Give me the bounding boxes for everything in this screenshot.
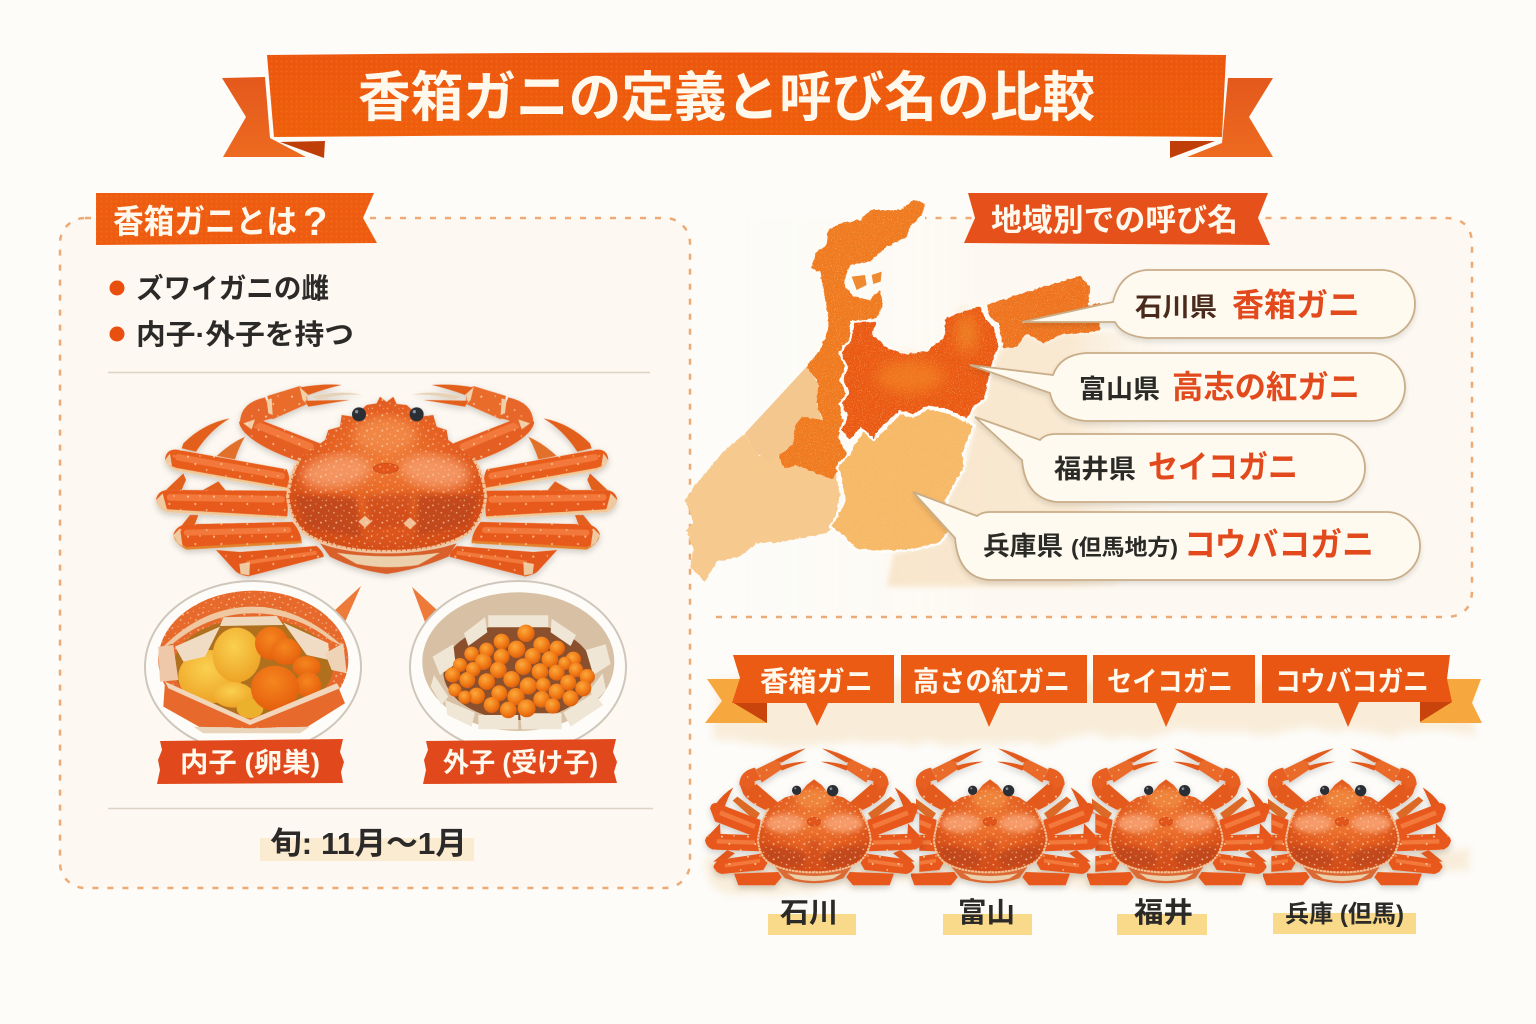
comparison ribbon [705, 655, 1482, 727]
ribbon tab: Koshi no Beni [901, 655, 1087, 727]
callout: Toyama [970, 353, 1405, 421]
panel heading: ? [303, 200, 327, 244]
panel: what is kobako crab [60, 193, 690, 888]
bullet list: 内子·外子を持つ [136, 319, 354, 350]
ribbon tab: Koubako: コウバコガニ [1275, 666, 1429, 697]
region label: Toyama [943, 897, 1032, 935]
crab: Ishikawa [705, 748, 923, 885]
illustration: snow crab [156, 385, 617, 576]
heading: regional names [964, 193, 1270, 245]
region label: Fukui: 福井 [1134, 897, 1193, 928]
region label: Fukui [1117, 897, 1207, 935]
region label: Hyogo: 兵庫 (但馬) [1285, 901, 1404, 928]
callout: Fukui: 福井県 [1054, 454, 1136, 484]
season note: 旬: 11月〜1月 [270, 826, 467, 861]
callout: Fukui: セイコガニ [1148, 449, 1298, 485]
bullet list [110, 272, 354, 350]
callout: Toyama: 高志の紅ガニ [1172, 369, 1360, 405]
panel heading [96, 193, 377, 245]
crab: Toyama [881, 748, 1099, 885]
ribbon tab: Kobako [732, 655, 894, 726]
heading: regional names: 地域別での呼び名 [991, 203, 1238, 238]
ribbon tab: Kobako: 香箱ガニ [760, 666, 873, 697]
ribbon tab: Koubako [1262, 655, 1452, 727]
title ribbon [222, 52, 1273, 158]
callout: Ishikawa: 香箱ガニ [1232, 287, 1360, 323]
region label: Toyama: 富山 [958, 897, 1015, 928]
region label: Hyogo [1273, 901, 1416, 934]
panel: regional names outline [716, 218, 1472, 617]
callout: Hyogo: (但馬地方) [1071, 535, 1178, 560]
title text: 香箱ガニの定義と呼び名の比較 [358, 68, 1095, 128]
callout: Ishikawa: 石川県 [1135, 292, 1217, 322]
inset: outer eggs [410, 581, 626, 753]
callout: Hyogo [913, 492, 1420, 580]
pointer arrows [335, 586, 437, 622]
comparison section background wash [702, 680, 1472, 898]
callout: Hyogo: コウバコガニ [1184, 526, 1374, 563]
crab: Hyogo [1233, 748, 1451, 885]
callout: Hyogo: 兵庫県 [983, 531, 1063, 561]
ribbon tab: Seiko: セイコガニ [1107, 666, 1233, 697]
callout: Fukui [975, 417, 1365, 502]
bullet list: ズワイガニの雌 [136, 272, 329, 304]
label: outer eggs [423, 739, 617, 784]
ribbon tab: Koshi no Beni: 高さの紅ガニ [913, 666, 1070, 697]
inset: inner roe [145, 581, 361, 753]
panel heading: 香箱ガニとは [113, 203, 297, 240]
ribbon tab: Seiko [1093, 655, 1255, 727]
map: regional prefectures [685, 200, 1193, 587]
callout: Toyama: 富山県 [1079, 374, 1160, 404]
region label: Ishikawa: 石川 [780, 897, 838, 928]
crab: Fukui [1057, 748, 1275, 885]
label: inner roe [157, 739, 344, 784]
callout: Ishikawa [1022, 270, 1415, 338]
label: outer eggs: 外子 (受け子) [443, 748, 598, 778]
region label: Ishikawa [768, 897, 856, 935]
label: inner roe: 内子 (卵巣) [180, 748, 320, 778]
